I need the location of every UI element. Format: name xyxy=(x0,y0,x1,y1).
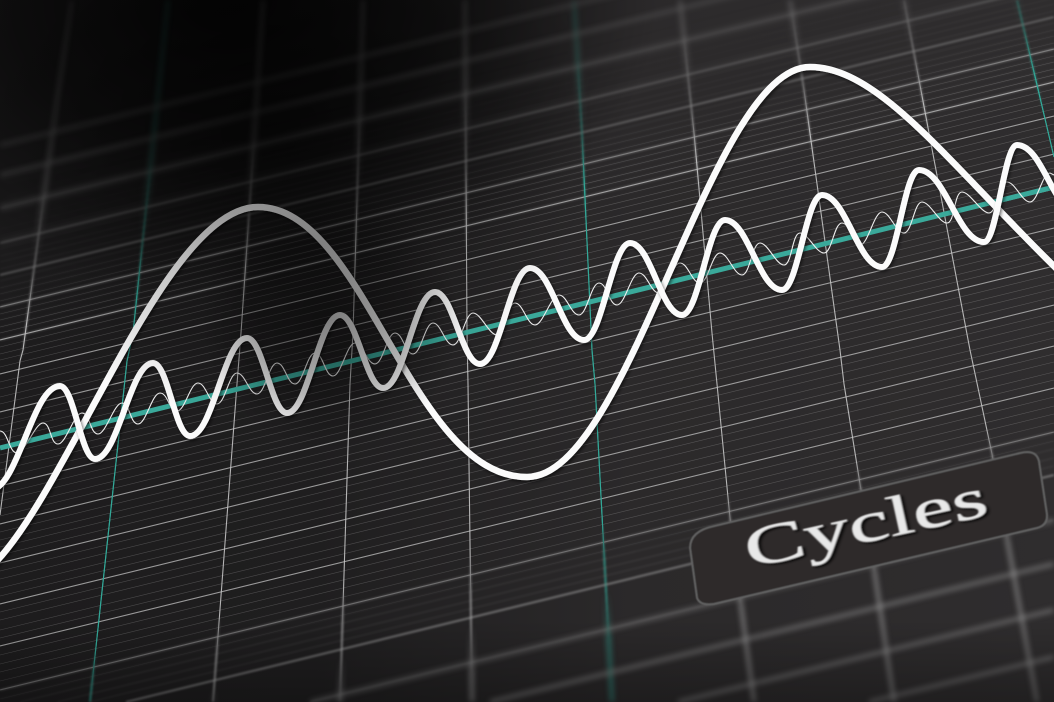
thin high-frequency wave xyxy=(0,173,1054,453)
medium thick wave xyxy=(0,145,1054,490)
label panel: Cycles xyxy=(690,452,1047,604)
large long-cycle wave xyxy=(0,67,1054,566)
label text: Cycles xyxy=(738,467,993,580)
label plate xyxy=(690,452,1047,604)
teal trend line xyxy=(0,187,1054,448)
